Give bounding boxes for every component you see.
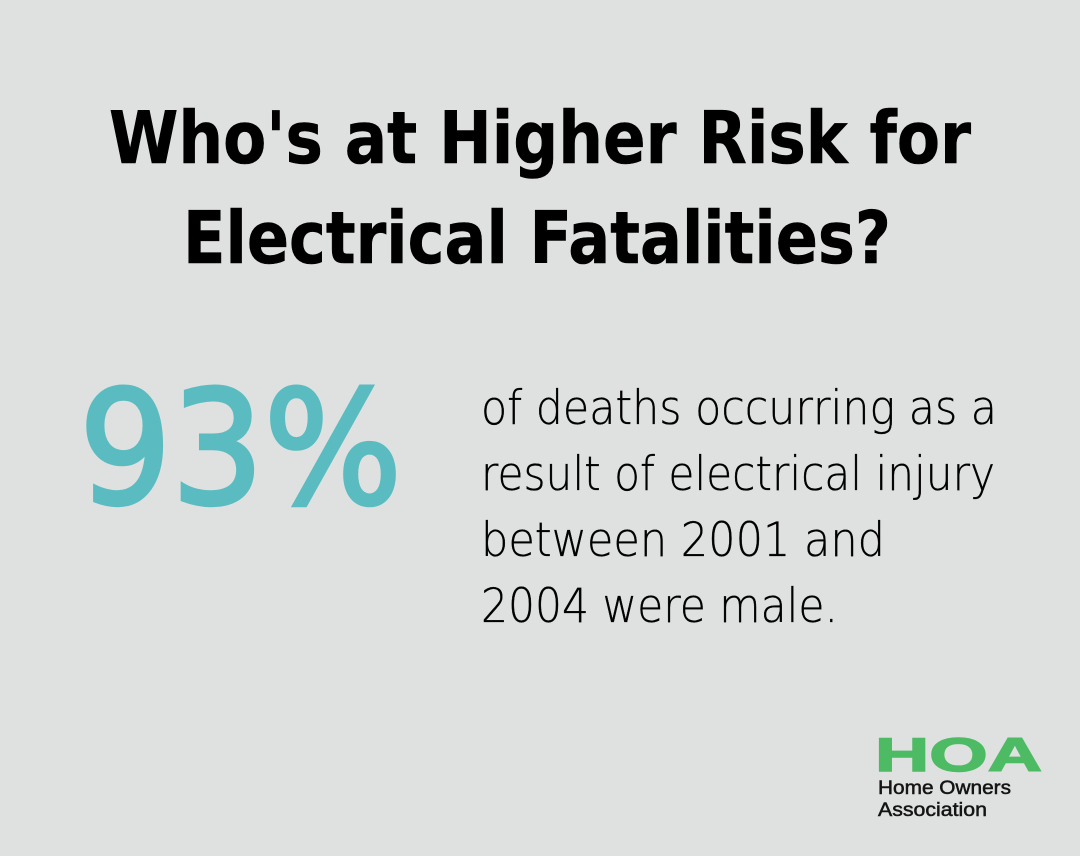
statistic description [481,381,997,634]
title: Electrical Fatalities? [183,196,891,280]
logo mark: HOA: HOA [875,728,1042,781]
title [109,96,971,280]
statistic description: of deaths occurring as a [481,381,997,436]
statistic description: between 2001 and [481,513,885,568]
logo: Home Owners Association [875,728,1042,821]
logo name: Home Owners [878,778,1011,799]
statistic description: 2004 were male. [481,579,838,634]
logo name: Association [878,800,987,821]
statistic description: result of electrical injury [481,447,995,502]
logo name [878,778,1011,821]
statistic: 93%: 93% [79,358,402,541]
title: Who's at Higher Risk for [109,96,971,180]
